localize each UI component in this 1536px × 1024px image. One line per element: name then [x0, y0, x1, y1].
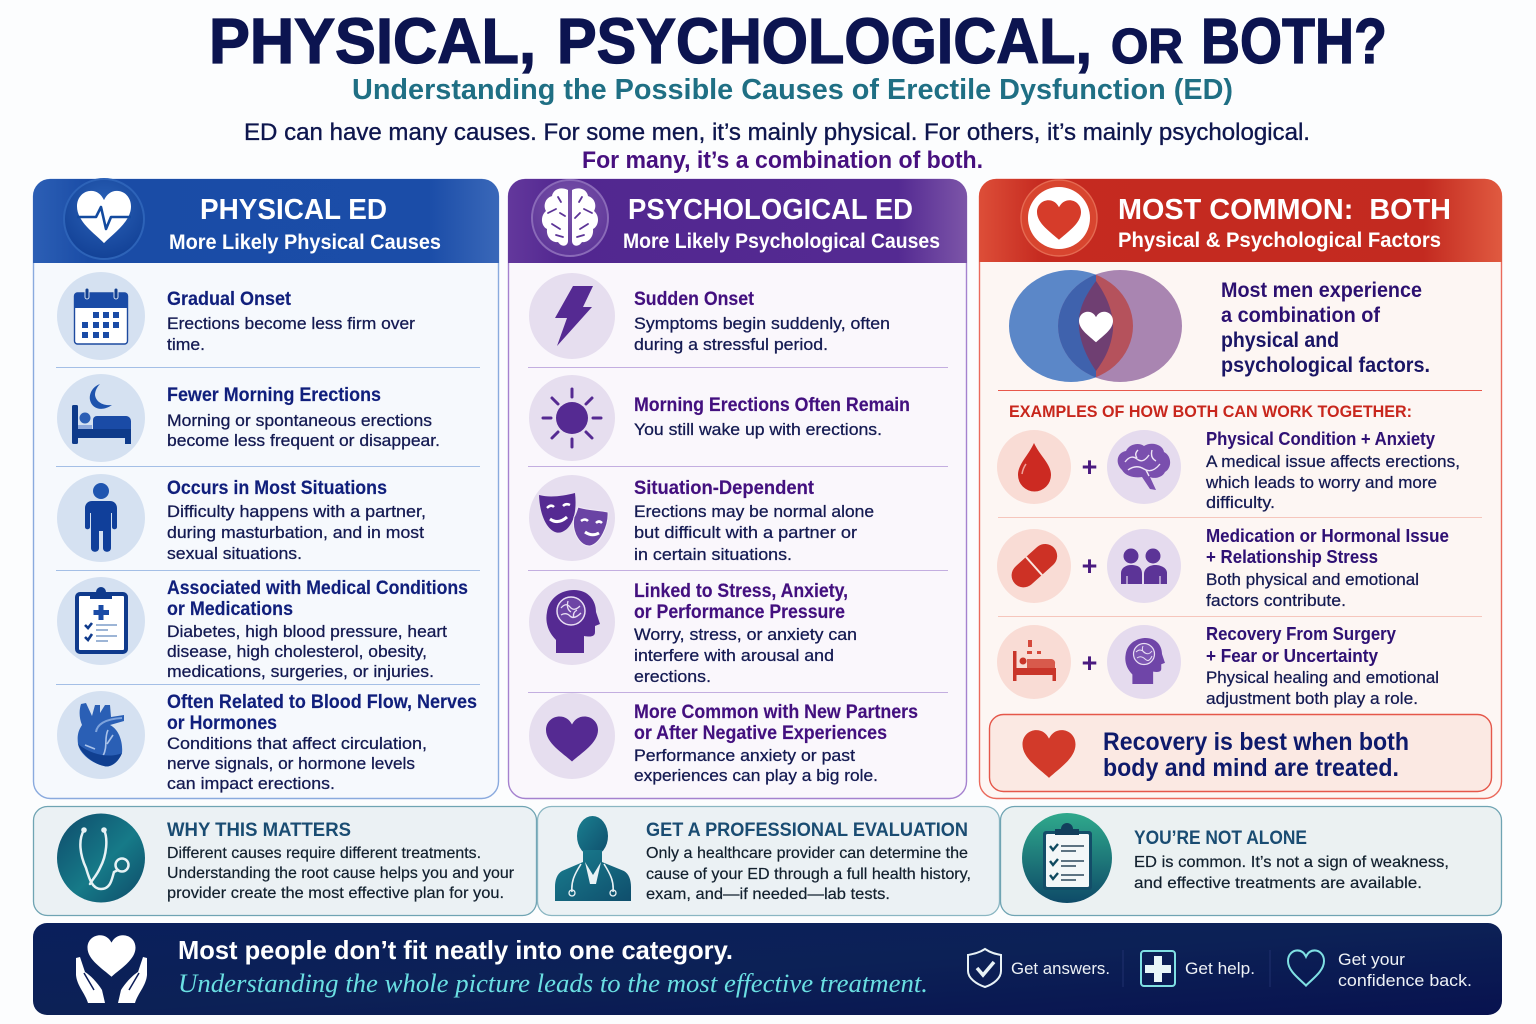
icon: stethoscope — [57, 814, 145, 902]
icon: sun — [529, 375, 615, 461]
text: combination statement — [1221, 279, 1430, 377]
text: surgery recovery and fear: Physical healing and emotional — [1206, 669, 1439, 687]
card: you're not alone — [1000, 806, 1502, 916]
text: blood flow, nerves or hormones: Often Related to Blood Flow, Nerves — [167, 692, 477, 713]
icon: heart outline — [1288, 950, 1324, 986]
card: get a professional evaluation — [538, 806, 1000, 916]
text: associated with medical conditions: Associated with Medical Conditions — [167, 578, 468, 599]
text: situation-dependent — [634, 478, 874, 564]
label: get your confidence back — [1338, 950, 1472, 990]
text: occurs in most situations: Difficulty happens with a partner, — [167, 502, 426, 521]
row: morning erections often remain — [529, 375, 910, 461]
text: stress, anxiety, performance pressure: Linked to Stress, Anxiety, — [634, 581, 848, 602]
text: occurs in most situations: Occurs in Most Situations — [167, 478, 387, 499]
label: get help: Get help. — [1185, 959, 1255, 978]
icon: calendar — [57, 272, 145, 360]
text: fewer morning erections — [167, 385, 440, 450]
text: situation-dependent: in certain situations. — [634, 545, 792, 564]
text: occurs in most situations: sexual situations. — [167, 544, 302, 563]
text: blood flow, nerves or hormones: can impact erections. — [167, 774, 335, 793]
icon: medical cross — [1141, 951, 1175, 986]
text: fewer morning erections: become less frequent or disappear. — [167, 431, 440, 450]
panel card — [34, 180, 498, 798]
panel: psychological ED — [508, 179, 967, 798]
text: gradual onset: Erections become less firm over — [167, 314, 415, 333]
text: combination statement: physical and — [1221, 329, 1339, 352]
icon: bed with moon — [57, 374, 145, 462]
text: stress, anxiety, performance pressure: erections. — [634, 667, 711, 686]
text: surgery recovery and fear: adjustment both play a role. — [1206, 690, 1418, 708]
example: medication and relationship stress — [997, 526, 1449, 610]
text: surgery recovery and fear — [1206, 624, 1439, 708]
text: stress, anxiety, performance pressure — [634, 581, 857, 686]
text: physical condition and anxiety: A medical issue affects erections, — [1206, 453, 1460, 471]
text: gradual onset: Gradual Onset — [167, 289, 292, 310]
icon: purple brain — [1107, 430, 1181, 504]
text: combination statement: Most men experience — [1221, 279, 1422, 302]
panel card — [980, 180, 1502, 798]
text: sudden onset: during a stressful period. — [634, 335, 828, 354]
text: blood flow, nerves or hormones: nerve signals, or hormone levels — [167, 754, 415, 773]
text: associated with medical conditions: Diabetes, high blood pressure, heart — [167, 622, 447, 641]
intro text: For many, it’s a combination of both. — [582, 147, 983, 174]
plus sign: + — [1082, 452, 1097, 482]
icon: heart with pulse — [64, 179, 144, 259]
banner script line: Understanding the whole picture leads to the most effective treatment. — [178, 969, 928, 998]
text: morning erections often remain — [634, 395, 910, 439]
text: morning erections often remain: You still wake up with erections. — [634, 420, 882, 439]
text: situation-dependent: Erections may be normal alone — [634, 502, 874, 521]
icon: doctor — [555, 816, 631, 901]
icon: two people — [1107, 529, 1181, 603]
plus sign: + — [1082, 551, 1097, 581]
text: medication and relationship stress: factors contribute. — [1206, 592, 1346, 610]
text: new partners or negative experiences: or After Negative Experiences — [634, 723, 887, 744]
text: associated with medical conditions — [167, 578, 468, 681]
plus sign: + — [1082, 648, 1097, 678]
row: sudden onset — [529, 273, 890, 359]
text: blood flow, nerves or hormones: or Hormones — [167, 713, 277, 734]
label: get your confidence back: Get your — [1338, 950, 1405, 969]
row: fewer morning erections — [57, 374, 440, 462]
icon: pill — [997, 529, 1071, 603]
text: physical condition and anxiety — [1205, 429, 1460, 512]
text: get a professional evaluation: cause of your ED through a full health history, — [646, 866, 971, 883]
venn diagram — [1009, 270, 1182, 382]
text: why this matters: Different causes require different treatments. — [167, 845, 481, 862]
both header band — [979, 179, 1502, 262]
text: you're not alone: and effective treatments are available. — [1134, 875, 1422, 892]
row: gradual onset — [57, 272, 415, 360]
card: why this matters — [34, 806, 536, 916]
text: new partners or negative experiences: experiences can play a big role. — [634, 766, 878, 785]
text: get a professional evaluation: GET A PROFESSIONAL EVALUATION — [646, 819, 968, 841]
text: stress, anxiety, performance pressure: interfere with arousal and — [634, 646, 834, 665]
text: sudden onset: Sudden Onset — [634, 289, 755, 310]
panel: physical ED — [33, 179, 499, 798]
icon: heart in white ring — [1021, 180, 1097, 256]
physical subheading: More Likely Physical Causes — [169, 231, 441, 254]
text: medication and relationship stress — [1206, 526, 1449, 610]
text: you're not alone: YOU’RE NOT ALONE — [1134, 827, 1307, 849]
title: PSYCHOLOGICAL, — [557, 5, 1092, 77]
text: get a professional evaluation: Only a healthcare provider can determine the — [646, 845, 968, 862]
text: new partners or negative experiences: More Common with New Partners — [634, 702, 918, 723]
text: new partners or negative experiences: Performance anxiety or past — [634, 746, 855, 765]
icon: person — [57, 474, 145, 562]
text: physical condition and anxiety: Physical Condition + Anxiety — [1206, 429, 1435, 449]
text: combination statement: a combination of — [1221, 304, 1381, 327]
row: associated with medical conditions — [57, 577, 468, 681]
text: you're not alone: ED is common. It’s not a sign of weakness, — [1134, 854, 1449, 871]
text: get a professional evaluation: exam, and—if needed—lab tests. — [646, 886, 890, 903]
callout: recovery — [990, 714, 1492, 792]
row: blood flow, nerves or hormones — [57, 691, 477, 793]
icon: head with brain — [1107, 625, 1181, 699]
text: medication and relationship stress: + Relationship Stress — [1206, 547, 1378, 567]
text: get a professional evaluation — [646, 819, 971, 903]
icon: shield — [968, 949, 1001, 987]
icon: checklist clipboard — [1022, 813, 1112, 903]
text: sudden onset: Symptoms begin suddenly, often — [634, 314, 890, 333]
text: medication and relationship stress: Both physical and emotional — [1206, 571, 1419, 589]
text: surgery recovery and fear: + Fear or Uncertainty — [1206, 646, 1378, 666]
icon: purple heart — [529, 693, 615, 779]
label: get your confidence back: confidence back. — [1338, 971, 1472, 990]
example: surgery recovery and fear — [997, 624, 1439, 708]
panel card — [508, 180, 966, 798]
text: physical condition and anxiety: which leads to worry and more — [1205, 474, 1437, 492]
icon: red heart — [1022, 730, 1076, 778]
intro text — [244, 119, 1310, 174]
text: fewer morning erections: Fewer Morning Erections — [167, 385, 381, 406]
callout text: Recovery is best when both — [1103, 728, 1409, 756]
text: new partners or negative experiences — [634, 702, 918, 785]
text: gradual onset — [167, 289, 415, 354]
subtitle: Understanding the Possible Causes of Erectile Dysfunction (ED) — [352, 74, 1233, 106]
icon: hospital bed — [997, 625, 1071, 699]
text: occurs in most situations: during masturbation, and in most — [167, 523, 424, 542]
icon: lightning bolt — [529, 273, 615, 359]
text: blood flow, nerves or hormones — [167, 692, 477, 793]
text: associated with medical conditions: or Medications — [167, 599, 293, 620]
title: OR — [1111, 20, 1183, 74]
text: fewer morning erections: Morning or spontaneous erections — [167, 411, 432, 430]
text: gradual onset: time. — [167, 335, 205, 354]
icon: blood drop — [997, 430, 1071, 504]
text: medication and relationship stress: Medication or Hormonal Issue — [1206, 526, 1449, 546]
text: associated with medical conditions: disease, high cholesterol, obesity, — [167, 642, 427, 661]
text: stress, anxiety, performance pressure: Worry, stress, or anxiety can — [634, 625, 857, 644]
examples heading: EXAMPLES OF HOW BOTH CAN WORK TOGETHER: — [1009, 402, 1412, 421]
title — [209, 5, 1387, 77]
text: why this matters: provider create the most effective plan for you. — [167, 885, 504, 902]
callout text: body and mind are treated. — [1103, 754, 1399, 782]
example: physical condition and anxiety — [997, 429, 1460, 512]
label: get answers: Get answers. — [1011, 959, 1110, 978]
banner: closing message — [33, 923, 1502, 1015]
icon: medical clipboard — [57, 577, 145, 665]
text: morning erections often remain: Morning Erections Often Remain — [634, 395, 910, 416]
text: surgery recovery and fear: Recovery From Surgery — [1206, 624, 1396, 644]
text: associated with medical conditions: medications, surgeries, or injuries. — [167, 662, 434, 681]
row: occurs in most situations — [57, 474, 426, 563]
icon: theatre masks — [529, 475, 615, 561]
text: situation-dependent: but difficult with a partner or — [634, 523, 857, 542]
psychological heading: PSYCHOLOGICAL ED — [628, 194, 913, 226]
text: blood flow, nerves or hormones: Conditions that affect circulation, — [167, 734, 427, 753]
physical heading: PHYSICAL ED — [200, 194, 387, 226]
text: combination statement: psychological factors. — [1221, 354, 1430, 377]
physical header band — [33, 179, 499, 263]
row: situation-dependent — [529, 475, 874, 564]
text: stress, anxiety, performance pressure: or Performance Pressure — [634, 602, 845, 623]
psychological header band — [508, 179, 967, 263]
text: sudden onset — [634, 289, 890, 354]
icon: anatomical heart — [57, 691, 145, 779]
title: PHYSICAL, — [209, 5, 536, 77]
row: new partners or negative experiences — [529, 693, 918, 785]
both subheading: Physical & Psychological Factors — [1118, 229, 1441, 252]
banner text: Most people don’t fit neatly into one category. — [178, 935, 733, 965]
text: physical condition and anxiety: difficulty. — [1206, 494, 1275, 512]
text: situation-dependent: Situation-Dependent — [634, 478, 815, 499]
text: you're not alone — [1134, 827, 1449, 892]
icon: head with brain — [529, 579, 615, 665]
text: why this matters — [167, 819, 515, 902]
icon: hands holding heart — [76, 935, 147, 1003]
intro text: ED can have many causes. For some men, it’s mainly physical. For others, it’s mainly psychological. — [244, 119, 1310, 146]
psychological subheading: More Likely Psychological Causes — [623, 230, 940, 253]
text: why this matters: Understanding the root cause helps you and your — [167, 865, 515, 882]
text: why this matters: WHY THIS MATTERS — [167, 819, 351, 841]
icon: brain — [532, 180, 608, 256]
row: stress, anxiety, performance pressure — [529, 579, 857, 686]
panel: most common both — [979, 179, 1502, 798]
callout text — [1103, 728, 1409, 782]
text: occurs in most situations — [167, 478, 426, 563]
title: BOTH? — [1201, 5, 1387, 77]
both heading: MOST COMMON: BOTH — [1118, 194, 1451, 226]
